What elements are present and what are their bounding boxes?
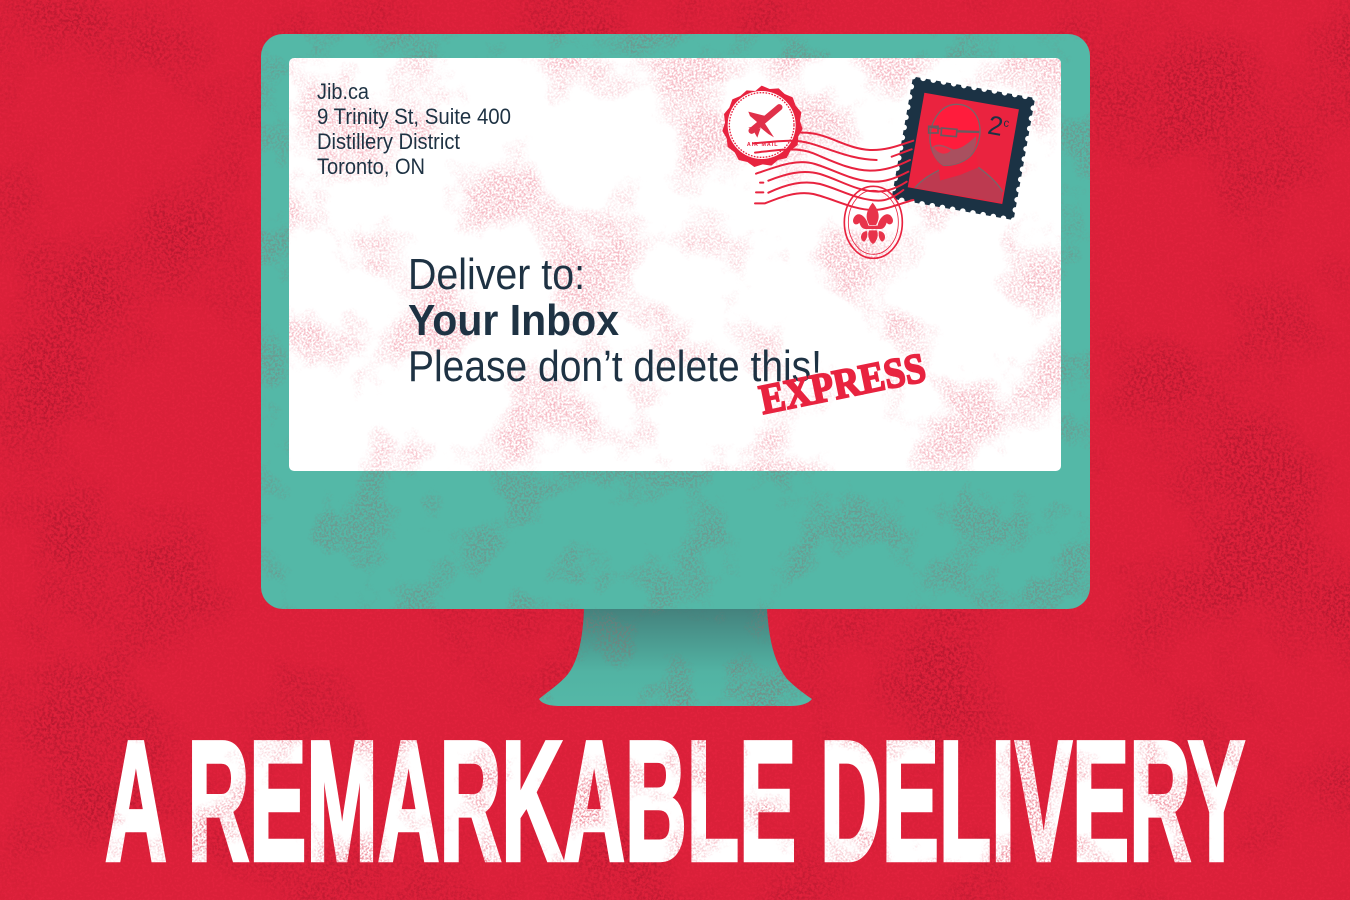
plane — [748, 107, 779, 138]
title — [106, 740, 1246, 862]
return address: Jib.ca — [317, 79, 370, 104]
delivery address — [408, 250, 822, 391]
return address: 9 Trinity St, Suite 400 — [317, 104, 511, 129]
delivery address: Your Inbox — [408, 296, 619, 345]
monitor stand — [530, 609, 820, 709]
return address — [317, 79, 511, 179]
price: 2c: c — [1002, 117, 1010, 130]
delivery address: Please don’t delete this! — [408, 342, 822, 391]
stamp: air mail postmark: AIR MAIL — [747, 142, 779, 148]
stamp: EXPRESS: EXPRESS — [756, 345, 930, 424]
stamp: wavy cancellation lines — [753, 133, 913, 210]
panel: envelope on screen — [289, 58, 1061, 471]
portrait: neck — [939, 147, 978, 181]
monitor body — [261, 34, 1090, 609]
stamp: fleur-de-lis postmark — [844, 186, 902, 258]
portrait: beard — [932, 136, 976, 165]
portrait: shoulders — [907, 167, 1003, 203]
return address: Distillery District — [317, 129, 460, 154]
stamp: postage stamp with portrait — [892, 77, 1035, 220]
delivery address: Deliver to: — [408, 250, 585, 299]
return address: Toronto, ON — [317, 154, 425, 179]
stamp paper with perforated edge — [892, 77, 1035, 220]
price: 2c: 2 — [986, 110, 1005, 142]
portrait: head — [930, 104, 980, 165]
stamp: air mail postmark — [722, 86, 803, 167]
portrait: glasses — [928, 126, 979, 137]
portrait: mouth — [934, 146, 951, 154]
